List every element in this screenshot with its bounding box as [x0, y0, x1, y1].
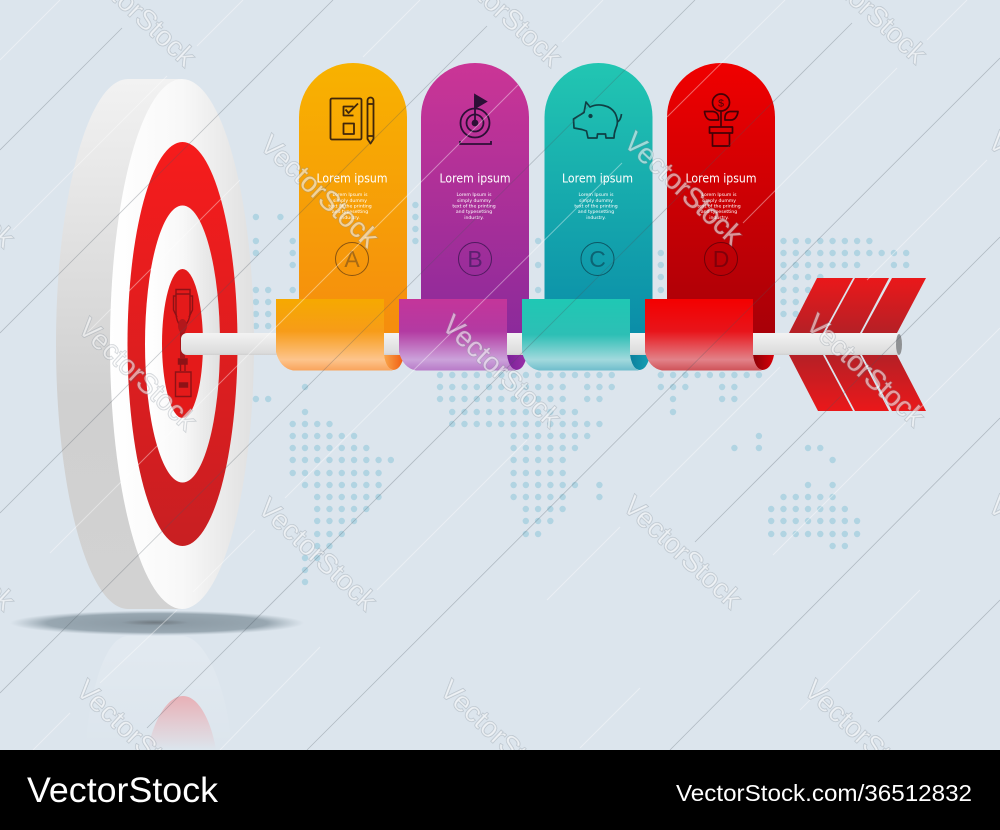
panel B body text: text of the printing — [452, 204, 496, 210]
panel B body text: simply dummy — [457, 198, 491, 204]
panel B letter badge — [458, 242, 492, 276]
watermarks: VectorStock — [436, 309, 567, 434]
watermarks: VectorStock — [72, 312, 203, 437]
panel A body text: text of the printing — [328, 204, 372, 210]
panel C letter badge — [581, 242, 614, 276]
watermarks: VectorStock — [618, 126, 749, 251]
ribbon B — [399, 299, 527, 370]
watermarks: VectorStock — [617, 490, 748, 615]
panel C — [544, 63, 652, 340]
watermarks: VectorStock — [252, 492, 383, 617]
panel A letter badge: A — [344, 246, 360, 272]
panel B body text: and typesetting — [456, 209, 492, 215]
panel D — [667, 63, 775, 340]
panel A body text: simply dummy — [333, 198, 367, 204]
panel A body text: industry. — [340, 215, 360, 221]
panel A — [299, 63, 407, 340]
panel D body text: text of the printing — [697, 204, 741, 210]
target face — [110, 79, 254, 609]
panel C heading: Lorem ipsum — [562, 172, 633, 186]
panel B — [421, 63, 529, 340]
watermarks: VectorStock — [70, 674, 201, 799]
panel C body text: industry. — [586, 215, 606, 221]
panel B body text: Lorem Ipsum is — [456, 192, 492, 198]
target reflection — [85, 636, 232, 750]
panel C letter badge: C — [589, 246, 606, 272]
panel A body text: and typesetting — [332, 209, 368, 215]
panel D letter badge: D — [713, 246, 729, 272]
watermarks: VectorStock — [800, 308, 931, 433]
panel D body text: and typesetting — [701, 209, 737, 215]
ribbon A — [276, 299, 404, 370]
panel C body text: Lorem Ipsum is — [578, 192, 614, 198]
footer brand: VectorStock — [27, 771, 219, 810]
panel C body text: simply dummy — [579, 198, 613, 204]
ribbon D — [645, 299, 774, 370]
icon: money plant: $ — [718, 97, 724, 109]
arrow fletching — [789, 278, 926, 411]
panel D letter badge — [704, 242, 738, 276]
panel A letter badge — [336, 242, 368, 276]
panel D body text: simply dummy — [702, 198, 736, 204]
footer bar — [0, 750, 1000, 830]
shadow under target — [10, 610, 304, 636]
footer image id: VectorStock.com/36512832 — [676, 780, 972, 806]
watermarks: VectorStock — [434, 674, 565, 799]
panel B body text: industry. — [464, 215, 484, 221]
bullseye — [162, 269, 203, 418]
icon: money plant — [704, 94, 738, 146]
icon: checklist and pencil — [330, 98, 374, 144]
watermarks: VectorStock — [798, 674, 929, 799]
arrow shaft — [181, 333, 902, 355]
panel D body text: Lorem Ipsum is — [701, 192, 737, 198]
panel A heading: Lorem ipsum — [316, 172, 388, 186]
panel D body text: industry. — [709, 215, 729, 221]
panel A body text: Lorem Ipsum is — [332, 192, 368, 198]
icon: target with flag — [460, 95, 491, 144]
panel B heading: Lorem ipsum — [440, 172, 510, 186]
dotted world map — [256, 205, 906, 582]
panel D heading: Lorem ipsum — [686, 172, 756, 186]
panel C body text: and typesetting — [578, 209, 614, 215]
outer red ring — [128, 142, 238, 546]
white ring — [145, 206, 220, 482]
panel B letter badge: B — [467, 246, 483, 272]
ribbon C — [522, 299, 650, 370]
watermarks: VectorStock — [254, 129, 385, 254]
panel C body text: text of the printing — [574, 204, 618, 210]
icon: piggy bank — [574, 102, 622, 138]
icon: trophy — [174, 290, 192, 396]
target board — [56, 79, 254, 609]
target side wall — [56, 79, 182, 609]
